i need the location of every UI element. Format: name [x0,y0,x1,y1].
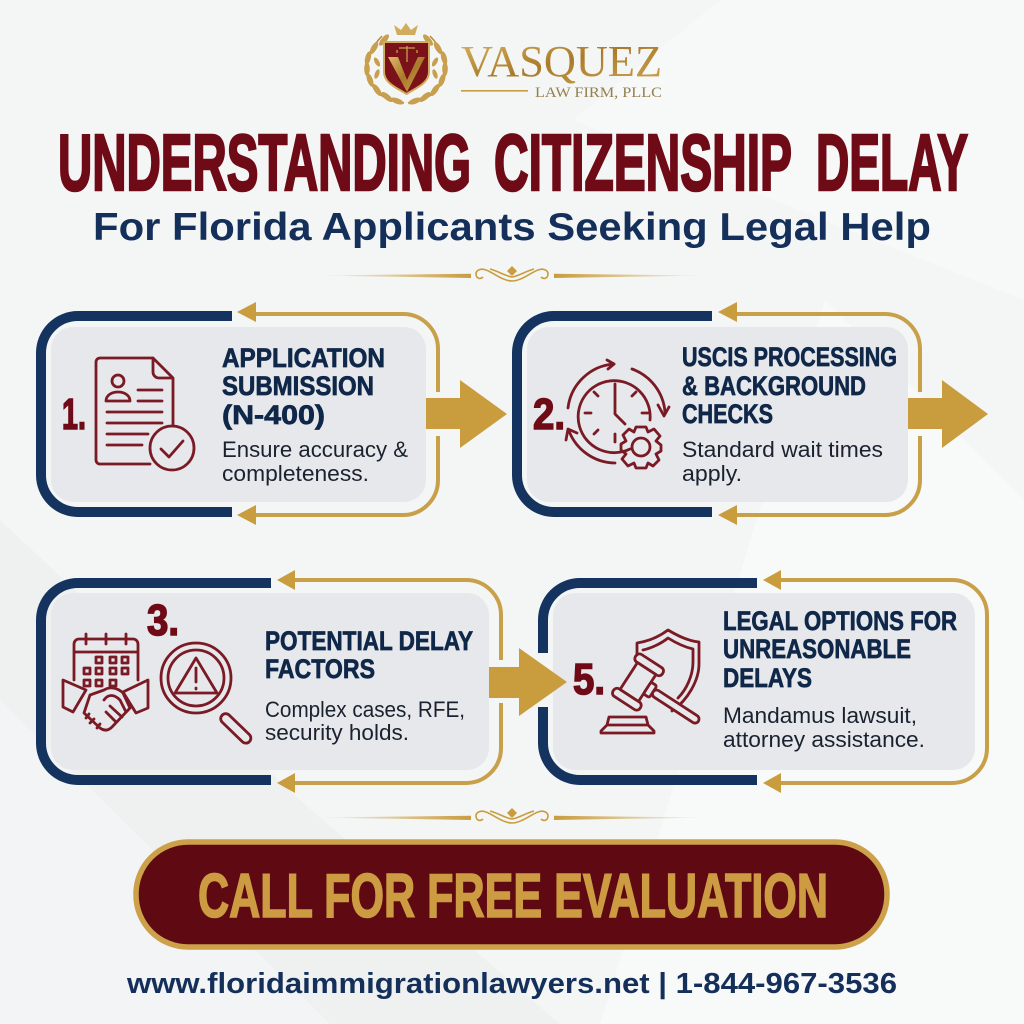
navy bracket [41,316,232,512]
icon: shield V [388,57,425,92]
number: 1. [62,390,86,439]
heading [265,626,473,684]
divider [315,266,709,281]
heading: FACTORS [265,654,375,684]
description: apply. [682,461,742,486]
panel: step 5 [543,570,987,793]
gold loop line [250,314,438,515]
icon: gavel [611,652,712,742]
heading: USCIS PROCESSING [682,342,897,372]
gold loop line [732,314,920,515]
icon: shield [637,630,699,711]
description: Ensure accuracy & [222,437,408,462]
gold arrowheads [718,302,737,525]
navy bracket [517,316,712,512]
description [222,437,408,486]
gold arrowheads [237,302,256,525]
description [723,703,925,752]
heading [682,342,897,429]
arrow: step 3 to step 5 [489,648,567,716]
icon: shield [384,42,429,94]
heading: POTENTIAL DELAY [265,626,473,656]
navy bracket [543,583,757,780]
gold loop line [776,580,987,783]
icon: scales detail [397,46,417,62]
logo rule [461,90,528,92]
title: CITIZENSHIP [494,118,792,207]
number: 2. [533,390,565,439]
arrow onward [908,380,988,448]
icon: laurel wreath [363,33,449,106]
icon: magnifier warning [161,643,253,745]
heading: SUBMISSION [222,371,374,401]
description: security holds. [265,720,409,745]
icon: clock with gear [566,360,669,468]
footer contact line: www.floridaimmigrationlawyers.net | 1-844-967-3536 [126,968,897,1000]
description [265,697,465,745]
icon: gavel base [601,717,654,733]
panel: step 1 [41,302,507,525]
navy bracket [41,583,271,780]
heading: CHECKS [682,399,773,429]
gold arrowheads [277,570,295,793]
heading [222,343,385,430]
divider [315,808,709,823]
logo subtitle: LAW FIRM, PLLC [535,85,662,101]
icon: calendar and handshake [63,634,148,730]
heading: UNREASONABLE [723,634,911,664]
description: attorney assistance. [723,727,925,752]
heading: (N-400) [222,400,325,430]
call to action [136,842,887,947]
title: UNDERSTANDING [58,118,471,207]
number: 5. [573,655,605,704]
heading: APPLICATION [222,343,385,373]
logo name: VASQUEZ [461,37,662,86]
button pill [136,842,887,947]
card background [51,593,489,770]
icon: crown [394,23,418,35]
number: 3. [147,596,179,645]
card background [553,593,975,770]
subtitle: For Florida Applicants Seeking Legal Help [93,206,931,249]
gold arrowheads [763,570,781,793]
heading [723,606,957,693]
card background [51,327,426,502]
description: completeness. [222,461,369,486]
heading: DELAYS [723,663,812,693]
gold loop line [290,580,501,783]
card background [527,327,908,502]
panel: step 2 [517,302,988,525]
description: Complex cases, RFE, [265,697,465,722]
description: Standard wait times [682,437,883,462]
arrow to step 2 [426,380,507,448]
panel: step 3 [41,570,501,793]
description [682,437,883,486]
heading: & BACKGROUND [682,371,866,401]
heading: LEGAL OPTIONS FOR [723,606,957,636]
icon: document check [96,358,194,470]
description: Mandamus lawsuit, [723,703,917,728]
logo [363,23,662,106]
